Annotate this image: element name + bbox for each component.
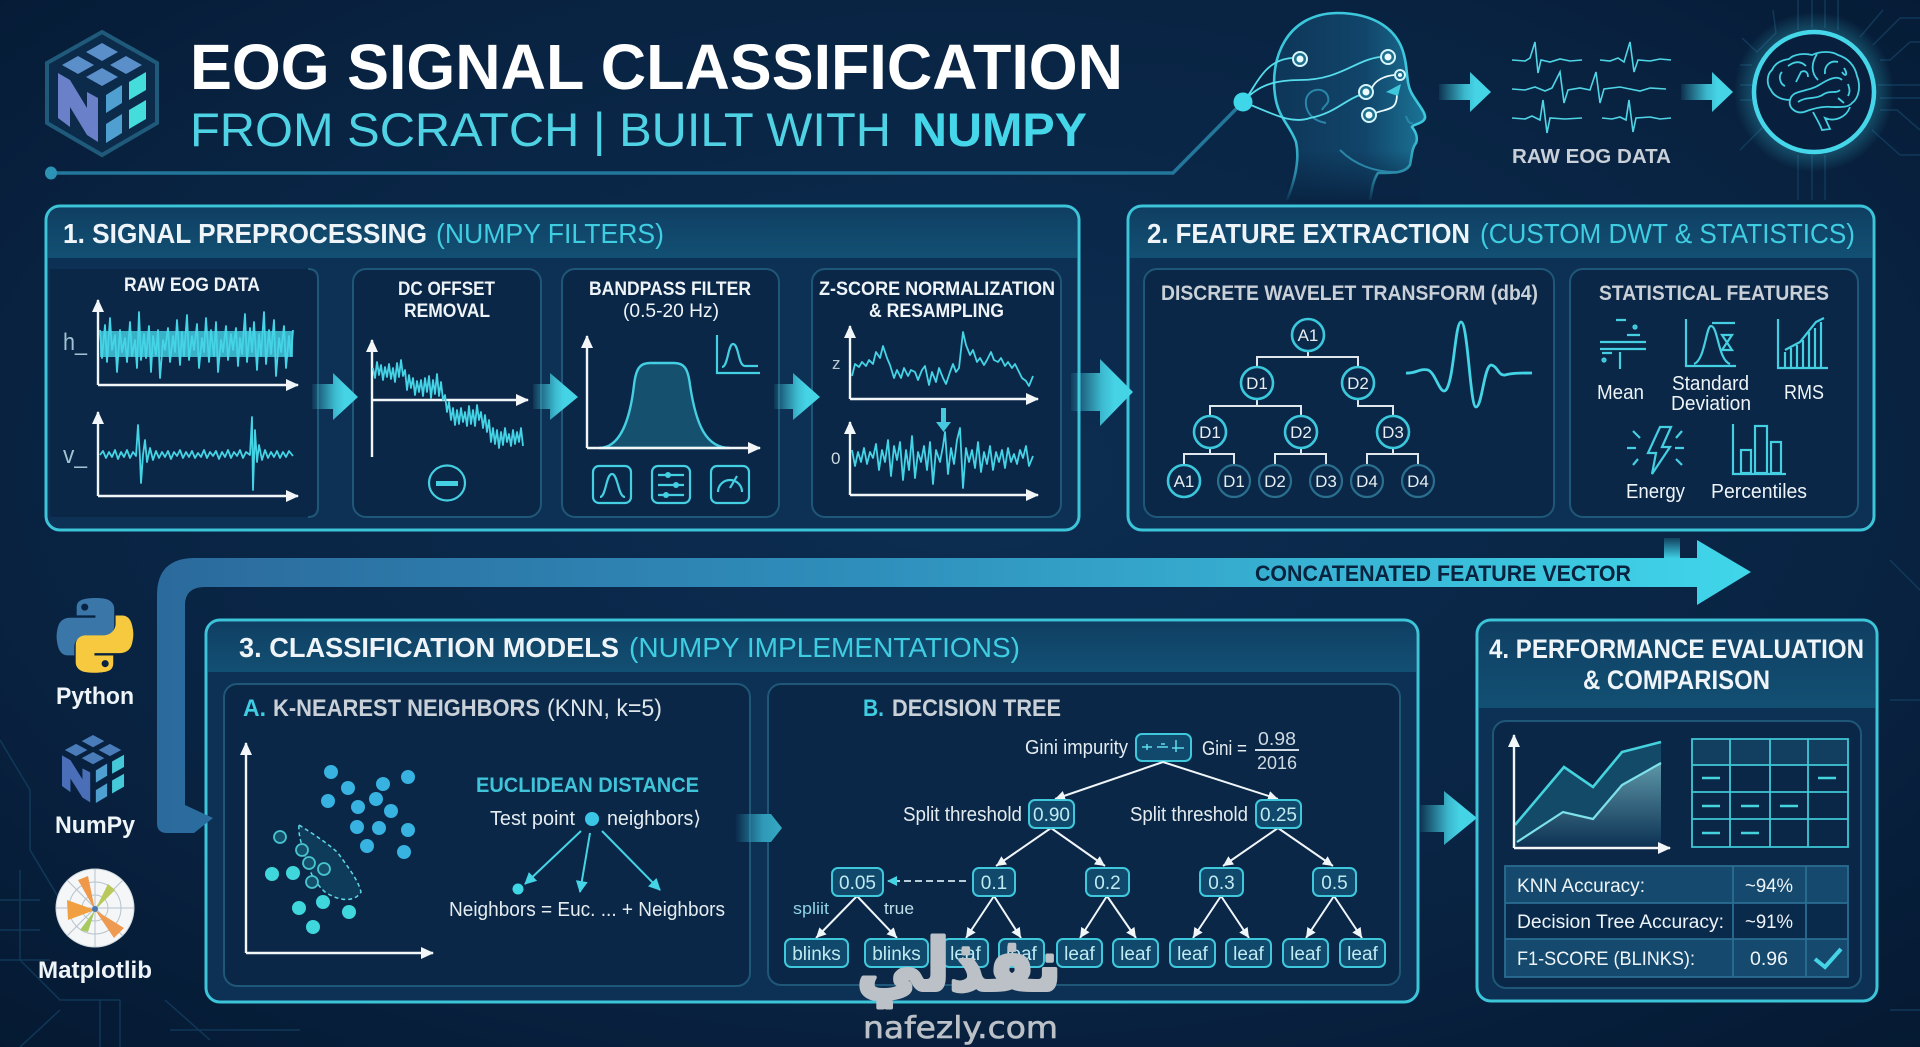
split labels: Split threshold <box>1130 804 1248 826</box>
arrow: DC offset to bandpass <box>533 373 578 420</box>
Euclidean distance diagram: Test point <box>490 808 575 830</box>
tree connectors <box>816 762 1362 938</box>
wavelet tree: D2 <box>1347 374 1369 393</box>
heading: feature extraction <box>1147 218 1855 249</box>
leaf nodes: leaf <box>950 944 982 965</box>
icon: numpy <box>62 735 124 803</box>
heading: performance evaluation: & COMPARISON <box>1583 665 1770 695</box>
gini root node: Gini = <box>1202 738 1247 760</box>
leaf nodes: leaf <box>1064 944 1096 965</box>
heading: KNN: A. <box>243 695 266 722</box>
sub-panel: raw EOG data <box>50 269 318 517</box>
connector line: title to head <box>45 102 1243 180</box>
sub-panel: raw EOG data: RAW EOG DATA <box>124 275 260 296</box>
label: numpy: NumPy <box>55 812 136 839</box>
split labels: true <box>884 899 914 918</box>
heading: signal preprocessing: 1. SIGNAL PREPROCESSING <box>63 218 427 249</box>
sub-panel: KNN <box>224 684 750 986</box>
metrics table: KNN Accuracy: <box>1517 876 1645 897</box>
label: standard deviation <box>1671 373 1751 415</box>
title: EOG SIGNAL CLASSIFICATION <box>190 31 1123 103</box>
icon: filter button <box>593 466 631 503</box>
sub-panel: bandpass filter <box>562 269 779 517</box>
label: concatenated feature vector: CONCATENATED FEATURE VECTOR <box>1255 561 1631 586</box>
wavelet tree: D2 <box>1290 423 1312 442</box>
leaf nodes: leaf <box>1177 944 1209 965</box>
label: mean: Mean <box>1597 382 1644 404</box>
metrics table: Decision Tree Accuracy: <box>1517 912 1724 933</box>
heading: signal preprocessing <box>63 218 664 249</box>
arrow: panel 1 to panel 2 <box>1071 359 1133 426</box>
threshold nodes <box>832 800 1356 896</box>
threshold nodes: 0.1 <box>981 873 1007 894</box>
wavelet tree: A1 <box>1174 472 1194 491</box>
metrics table: 0.96 <box>1750 949 1788 970</box>
heading: classification models: (NUMPY IMPLEMENTATIONS) <box>629 632 1020 663</box>
heading: decision tree: DECISION TREE <box>892 695 1061 722</box>
sub-panel: z-score normalization: Z-SCORE NORMALIZATION <box>819 279 1055 300</box>
icon: standard deviation <box>1686 319 1736 366</box>
wavelet tree: D1 <box>1199 423 1221 442</box>
leaf nodes: leaf <box>1347 944 1379 965</box>
sub-panel: statistical features <box>1570 269 1858 517</box>
heading: signal preprocessing: (NUMPY FILTERS) <box>436 218 664 249</box>
gini root node: 2016 <box>1257 753 1297 773</box>
icon: percentiles <box>1733 424 1786 474</box>
watermark: nafezly.com <box>863 1011 1058 1046</box>
Euclidean distance diagram: EUCLIDEAN DISTANCE <box>476 774 699 797</box>
sub-panel: decision tree <box>768 684 1400 985</box>
grid table <box>1692 739 1848 847</box>
heading: classification models: 3. CLASSIFICATION MODELS <box>239 632 619 663</box>
wavelet tree: A1 <box>1298 326 1318 345</box>
wavelet curve <box>1406 322 1532 407</box>
arrow: bandpass to z-score <box>774 373 820 420</box>
threshold nodes: 0.25 <box>1260 805 1297 826</box>
icon: mini curve <box>717 335 760 373</box>
heading: KNN <box>243 695 662 722</box>
wavelet tree: D3 <box>1315 472 1337 491</box>
heading: KNN: (KNN, k=5) <box>547 695 662 722</box>
threshold nodes: 0.2 <box>1094 873 1121 894</box>
heading: performance evaluation <box>1489 634 1864 695</box>
line chart <box>1514 735 1670 848</box>
icon: python <box>57 598 133 673</box>
heading: feature extraction: (CUSTOM DWT & STATISTICS) <box>1480 218 1855 249</box>
sub-panel: statistical features: STATISTICAL FEATURES <box>1599 282 1829 305</box>
heading: performance evaluation: 4. PERFORMANCE EVALUATION <box>1489 634 1864 664</box>
logo: numpy hexagon <box>47 32 157 155</box>
split labels: Split threshold <box>903 804 1022 826</box>
sub-panel: z-score normalization: & RESAMPLING <box>869 301 1004 322</box>
watermark: نفذلي <box>857 923 1061 1008</box>
arrow: head to raw data <box>1439 72 1491 112</box>
label: raw EOG data: RAW EOG DATA <box>1512 146 1671 168</box>
heading: feature extraction: 2. FEATURE EXTRACTION <box>1147 218 1470 249</box>
title block <box>47 31 1123 156</box>
arrow: raw to DC offset <box>312 373 358 420</box>
leaf nodes: blinks <box>872 944 921 965</box>
Euclidean distance diagram: neighbors⟩ <box>607 808 701 830</box>
heading: classification models <box>239 632 1020 663</box>
threshold nodes: 0.5 <box>1321 873 1348 894</box>
scatter plot <box>246 743 433 953</box>
sub-panel: results <box>1493 721 1861 988</box>
gini root node: Gini impurity <box>1025 737 1128 759</box>
icon: head with electrodes <box>1234 13 1425 203</box>
icon: matplotlib <box>56 869 134 947</box>
sub-panel: DC offset removal: REMOVAL <box>404 301 490 322</box>
sub-panel: discrete wavelet transform: DISCRETE WAVELET TRANSFORM (db4) <box>1161 282 1538 305</box>
wavelet tree <box>1168 319 1434 497</box>
metrics table: ~94% <box>1745 876 1793 897</box>
arrow: panel 3 to panel 4 <box>1420 791 1477 845</box>
label: energy: Energy <box>1626 481 1685 503</box>
label: standard deviation: Deviation <box>1671 393 1751 415</box>
sub-panel: z-score normalization <box>812 269 1061 517</box>
threshold nodes: 0.90 <box>1033 805 1070 826</box>
label: python: Python <box>56 683 134 710</box>
metrics table <box>1505 866 1848 977</box>
arrow: raw data to brain <box>1681 72 1733 112</box>
arrow band: concatenated feature vector <box>157 538 1751 833</box>
icon: brain circle <box>1734 12 1894 172</box>
leaf nodes: leaf <box>1006 944 1038 965</box>
wavelet tree: D4 <box>1356 472 1378 491</box>
heading: KNN: K-NEAREST NEIGHBORS <box>273 695 540 722</box>
split labels <box>793 804 1248 918</box>
arrow: KNN to decision tree <box>735 814 782 842</box>
heading: decision tree: B. <box>863 695 884 722</box>
sub-panel: z-score normalization: z <box>832 354 840 373</box>
label: RMS: RMS <box>1784 382 1824 404</box>
subtitle: NUMPY <box>912 103 1087 156</box>
icon: mean <box>1600 320 1646 369</box>
tech stack <box>38 598 152 984</box>
metrics table: F1-SCORE (BLINKS): <box>1517 949 1695 970</box>
icon: RMS <box>1778 318 1828 368</box>
wavelet tree: D1 <box>1246 374 1268 393</box>
wavelet tree: D1 <box>1223 472 1245 491</box>
leaf nodes: leaf <box>1120 944 1152 965</box>
arrow: down <box>936 408 951 432</box>
label: percentiles: Percentiles <box>1711 481 1807 503</box>
sub-panel: DC offset removal <box>353 269 541 517</box>
leaf nodes: blinks <box>792 944 841 965</box>
sub-panel: z-score normalization: 0 <box>831 449 840 468</box>
raw EOG waveforms <box>1512 42 1671 168</box>
label: matplotlib: Matplotlib <box>38 957 152 984</box>
watermark <box>857 923 1061 1046</box>
split labels: spliit <box>793 899 829 918</box>
leaf nodes <box>785 939 1385 967</box>
sub-panel: DC offset removal: DC OFFSET <box>398 279 495 300</box>
metrics table: ~91% <box>1745 912 1793 933</box>
gini root node <box>1025 729 1299 773</box>
panel 3: classification models <box>206 620 1418 1002</box>
icon: energy <box>1627 427 1684 474</box>
label: standard deviation: Standard <box>1672 373 1749 395</box>
threshold nodes: 0.3 <box>1208 873 1235 894</box>
leaf nodes: leaf <box>1233 944 1265 965</box>
sub-panel: bandpass filter: (0.5-20 Hz) <box>623 301 719 322</box>
panel 4: performance evaluation <box>1477 620 1877 1001</box>
threshold nodes: 0.05 <box>839 873 876 894</box>
leaf nodes: leaf <box>1290 944 1322 965</box>
wavelet tree: D3 <box>1382 423 1404 442</box>
sub-panel: bandpass filter: BANDPASS FILTER <box>589 279 751 300</box>
Euclidean distance diagram: Neighbors = Euc. ... + Neighbors <box>449 899 725 921</box>
sub-panel: discrete wavelet transform <box>1144 269 1554 517</box>
Euclidean distance diagram <box>449 774 725 921</box>
sub-panel: raw EOG data: v_ <box>63 442 88 469</box>
icon: minus <box>429 466 465 500</box>
wavelet tree: D4 <box>1407 472 1429 491</box>
gini root node: 0.98 <box>1258 729 1296 749</box>
icon: sliders button <box>652 466 690 503</box>
subtitle: FROM SCRATCH | BUILT WITH <box>190 103 891 156</box>
panel 1: signal preprocessing <box>46 206 1079 530</box>
wavelet tree: D2 <box>1264 472 1286 491</box>
panel 2: feature extraction <box>1128 206 1874 530</box>
icon: gauge button <box>711 466 749 503</box>
sub-panel: raw EOG data: h_ <box>63 329 88 356</box>
